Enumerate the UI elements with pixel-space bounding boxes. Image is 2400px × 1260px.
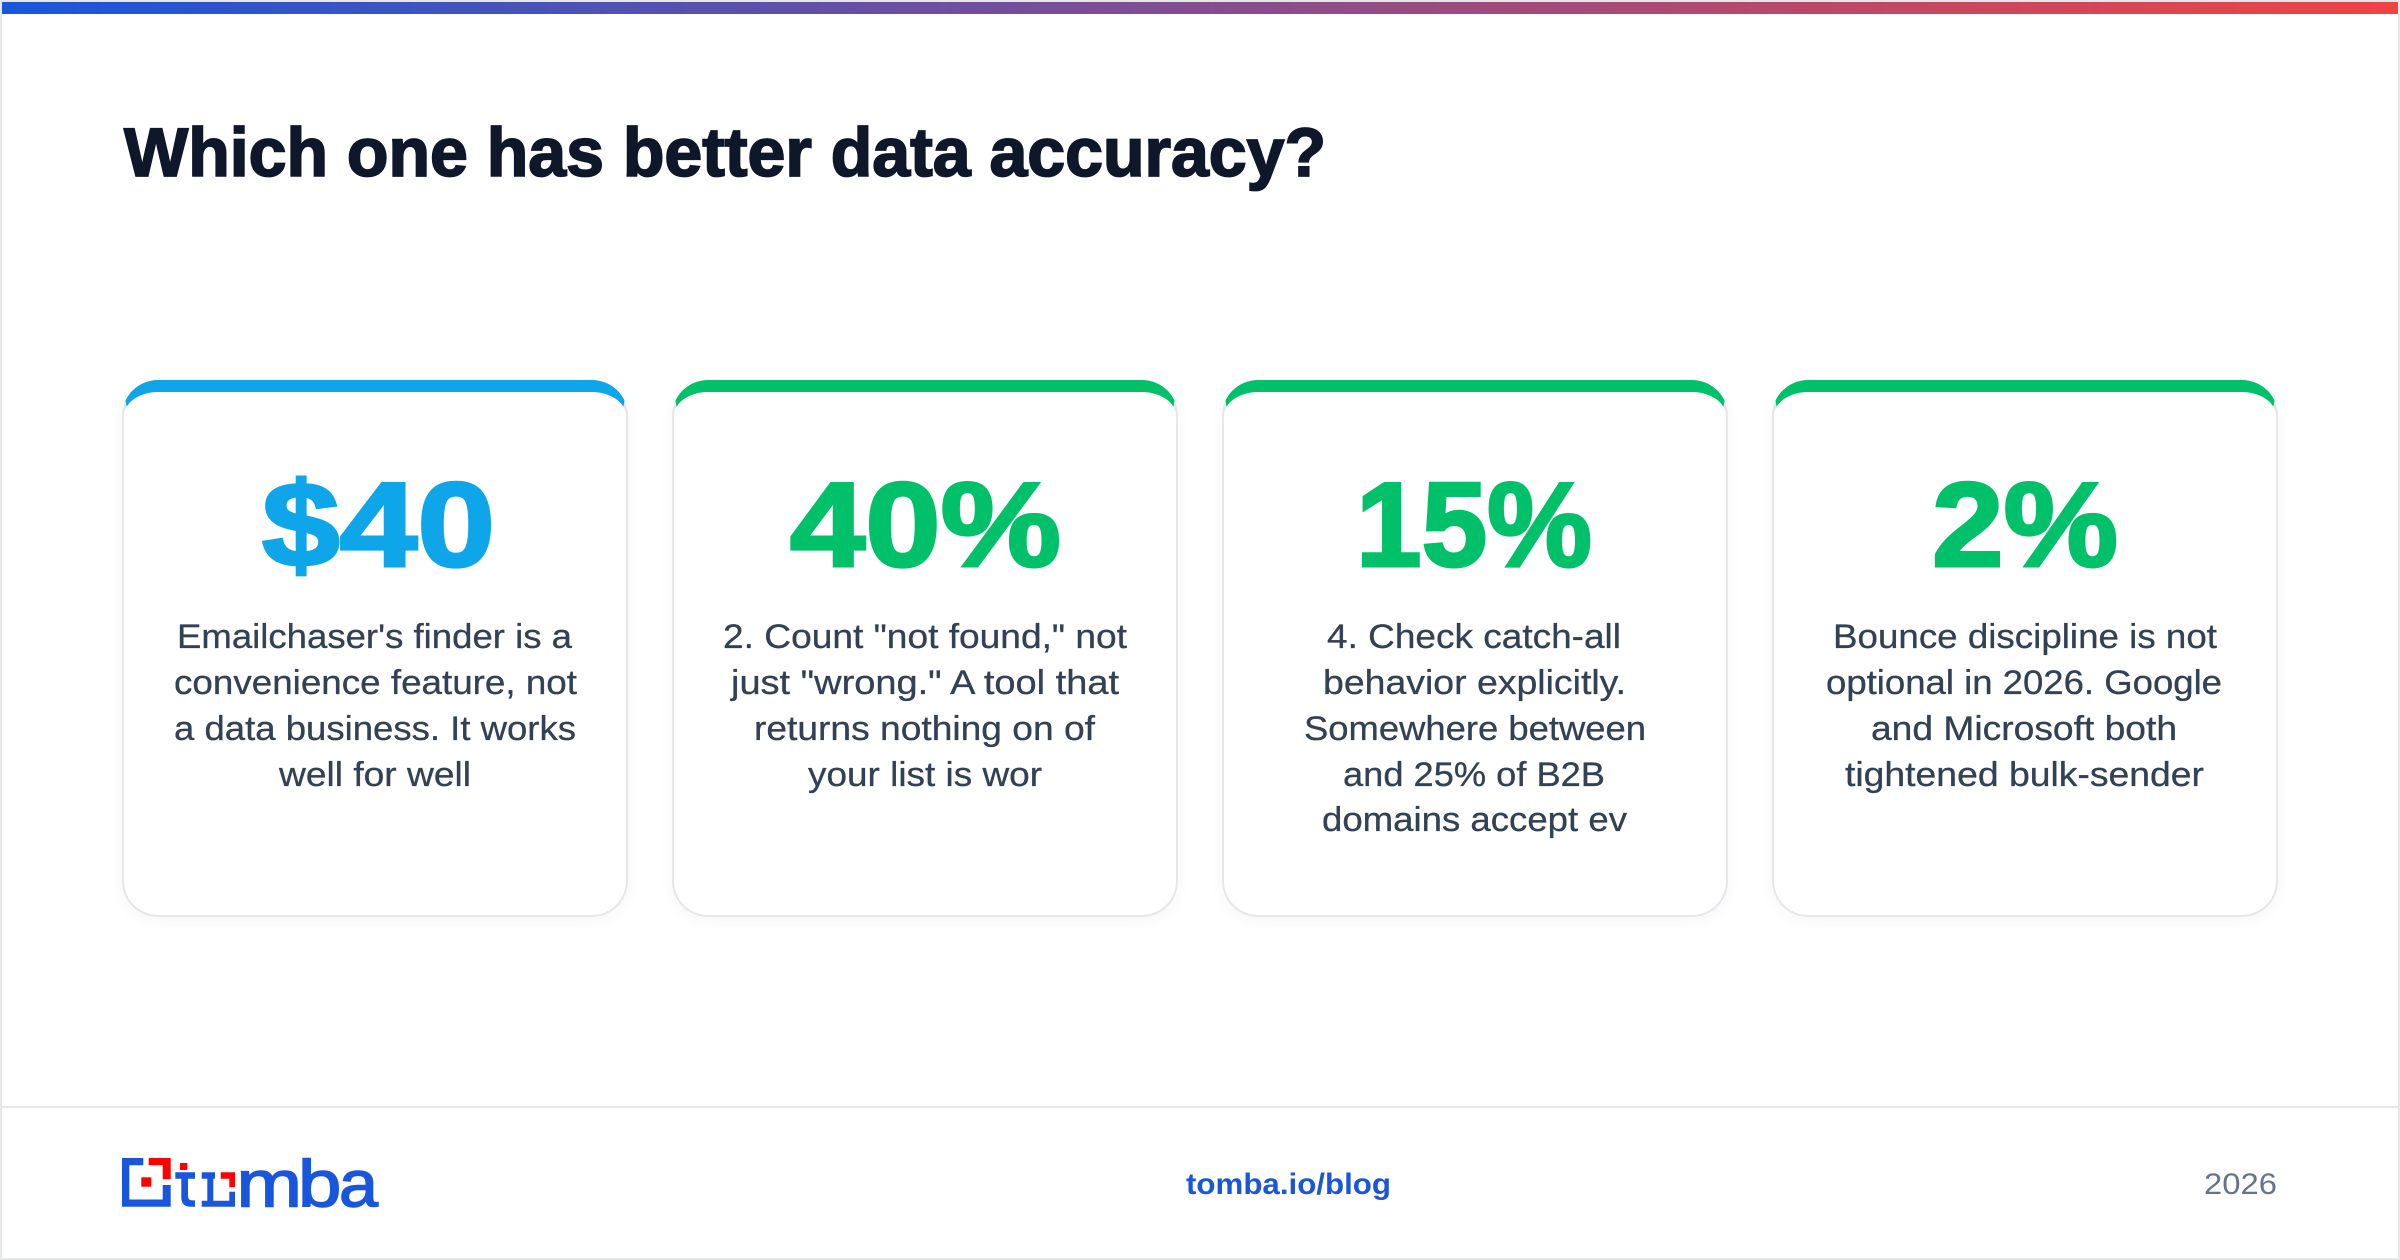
description text: convenience feature, not [174,664,578,702]
description text: well for well [278,756,471,794]
description text [1826,618,2222,794]
logo wordmark mba [236,1146,378,1220]
description text: and Microsoft both [1871,710,2177,748]
description text: just "wrong." A tool that [730,664,1120,702]
description text: domains accept ev [1322,801,1627,839]
description text: 2. Count "not found," not [723,618,1128,656]
description text: Somewhere between [1304,710,1646,748]
description text [723,618,1128,794]
description text: behavior explicitly. [1323,664,1626,702]
stat: 40%: 40% [790,458,1061,592]
description text: optional in 2026. Google [1826,664,2222,702]
stat: 2%: 2% [1932,458,2118,592]
stat: 15%: 15% [1356,458,1592,592]
description text: and 25% of B2B [1343,756,1605,794]
footer year: 2026 [2204,1168,2277,1201]
panel: 15% card [1222,380,1728,917]
title: Which one has better data accuracy? [124,114,1326,191]
description text [174,618,578,794]
panel: $40 card [122,380,628,917]
logo wordmark mba: a [339,1146,378,1220]
stat: $40: $40 [262,458,495,592]
panel: 2% card [1772,380,2278,917]
logo wordmark mba: b [298,1146,341,1220]
description text: your list is wor [808,756,1042,794]
top gradient bar [2,2,2398,14]
logo mark [122,1158,171,1207]
panel: 40% card [672,380,1178,917]
logo wordmark mba: m [236,1146,302,1220]
description text: Emailchaser's finder is a [177,618,572,656]
description text: a data business. It works [174,710,576,748]
logo: tomba [122,1146,378,1220]
description text: returns nothing on of [754,710,1096,748]
logo wordmark t and o [175,1163,235,1207]
description text: Bounce discipline is not [1833,618,2218,656]
description text: 4. Check catch-all [1327,618,1621,656]
description text [1304,618,1646,839]
description text: tightened bulk-sender [1845,756,2204,794]
footer link: tomba.io/blog [1186,1168,1391,1201]
